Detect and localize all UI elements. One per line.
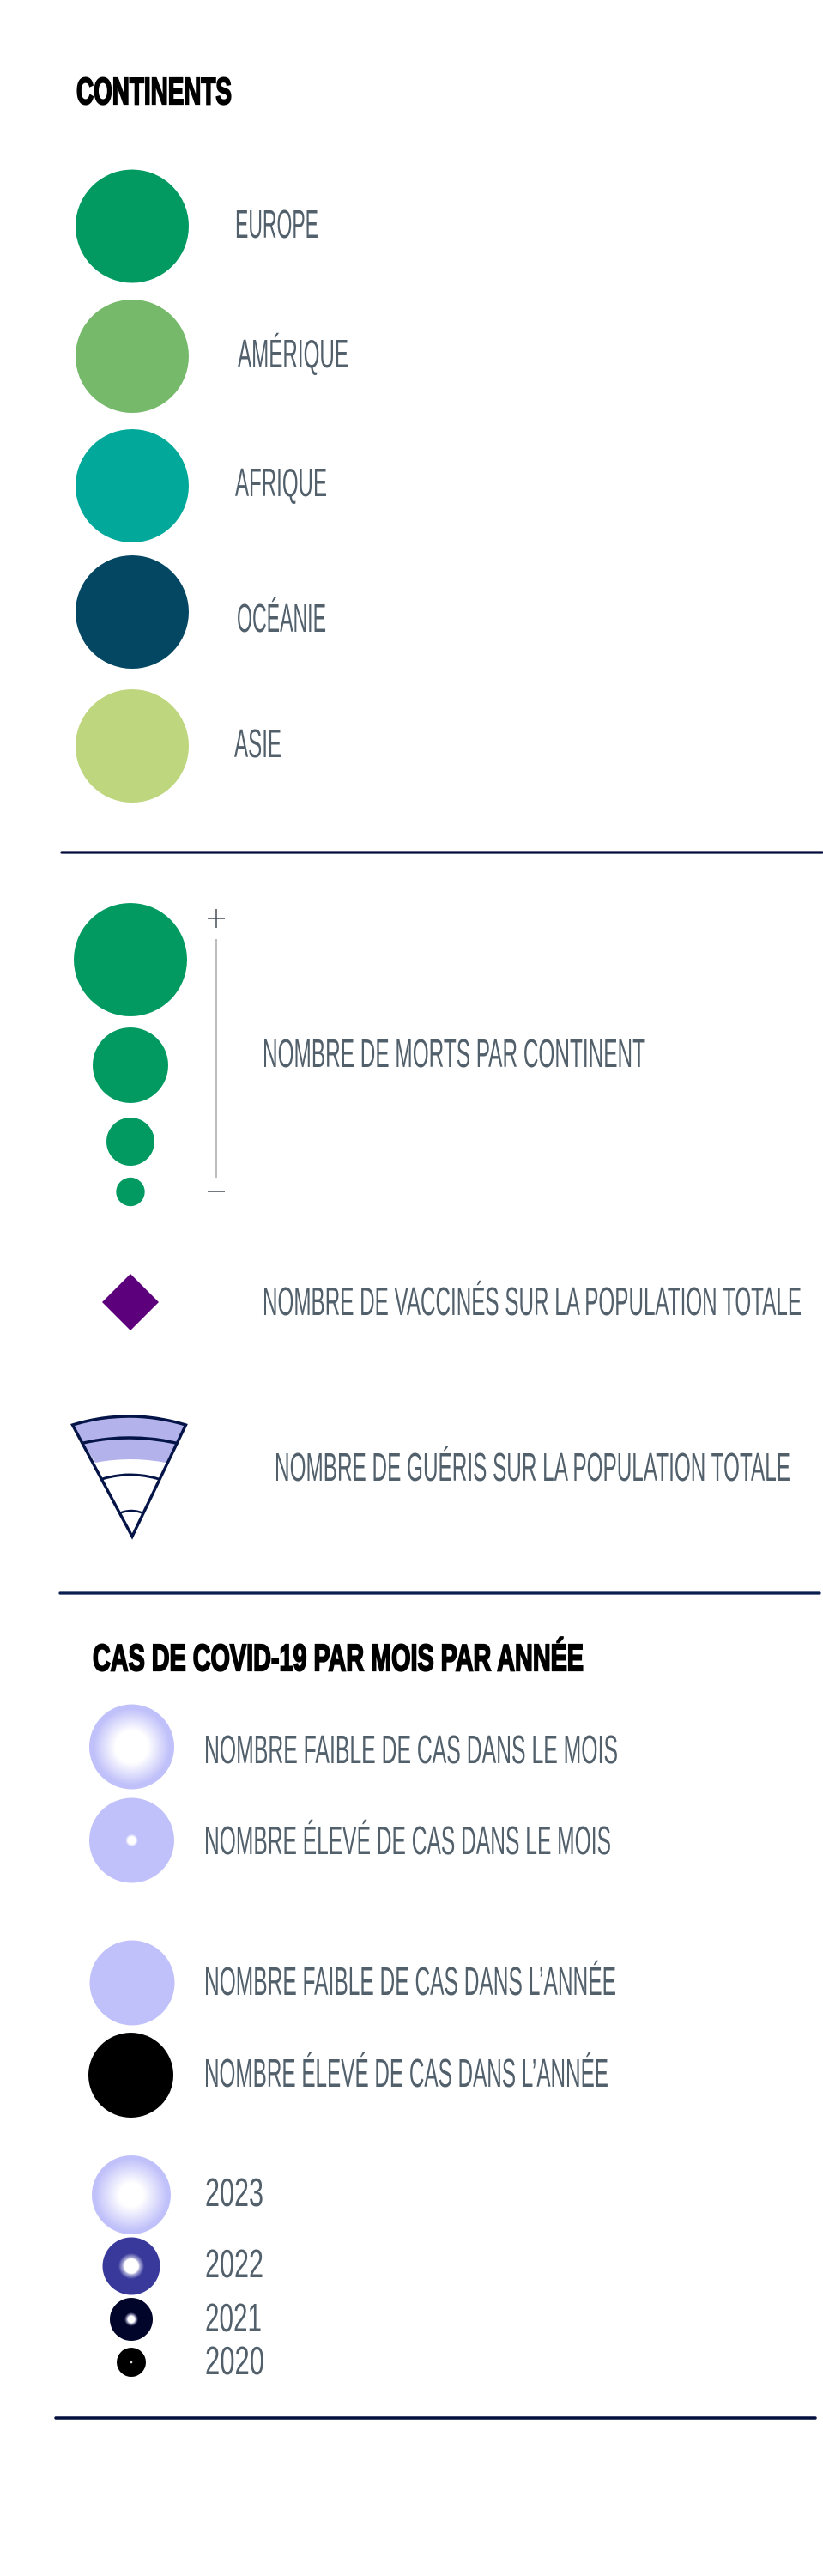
legend item: low yearly cases <box>89 1940 616 2026</box>
legend item: Amérique <box>76 300 348 413</box>
legend item: 2021: 2021 <box>205 2295 262 2340</box>
legend item: Asie: ASIE <box>234 721 281 766</box>
scale: plus to minus <box>208 909 225 1191</box>
icon: vaccinated diamond <box>102 1274 159 1330</box>
legend item: Asie <box>76 689 281 803</box>
panel: continents <box>76 70 348 803</box>
legend item: Amérique: AMÉRIQUE <box>238 331 348 376</box>
icon: recovered wedge <box>72 1416 186 1537</box>
legend item: Europe <box>76 170 318 283</box>
legend item: high yearly cases <box>88 2033 608 2118</box>
legend item: Afrique <box>76 429 327 542</box>
heading: continents: CONTINENTS <box>76 70 232 112</box>
legend item: low monthly cases <box>89 1705 618 1789</box>
legend item: high monthly cases <box>89 1797 611 1883</box>
panel: covid cases <box>88 1636 618 2383</box>
heading: covid cases: CAS DE COVID-19 PAR MOIS PAR ANNÉE <box>93 1636 584 1679</box>
legend item: Océanie <box>76 555 326 669</box>
legend item: 2023: 2023 <box>205 2170 263 2215</box>
legend item: 2020: 2020 <box>205 2338 264 2383</box>
legend item: Océanie: OCÉANIE <box>237 596 326 640</box>
legend item: 2023 <box>92 2155 263 2234</box>
size legend: deaths per continent <box>74 903 187 1206</box>
panel: symbols <box>72 903 802 1537</box>
legend item: 2022: 2022 <box>205 2241 263 2286</box>
legend item: 2020 <box>117 2338 264 2383</box>
panel: continents: EUROPE <box>235 202 318 246</box>
legend item: Afrique: AFRIQUE <box>235 460 327 505</box>
legend item: 2021 <box>110 2295 262 2341</box>
legend item: 2022 <box>103 2237 263 2295</box>
